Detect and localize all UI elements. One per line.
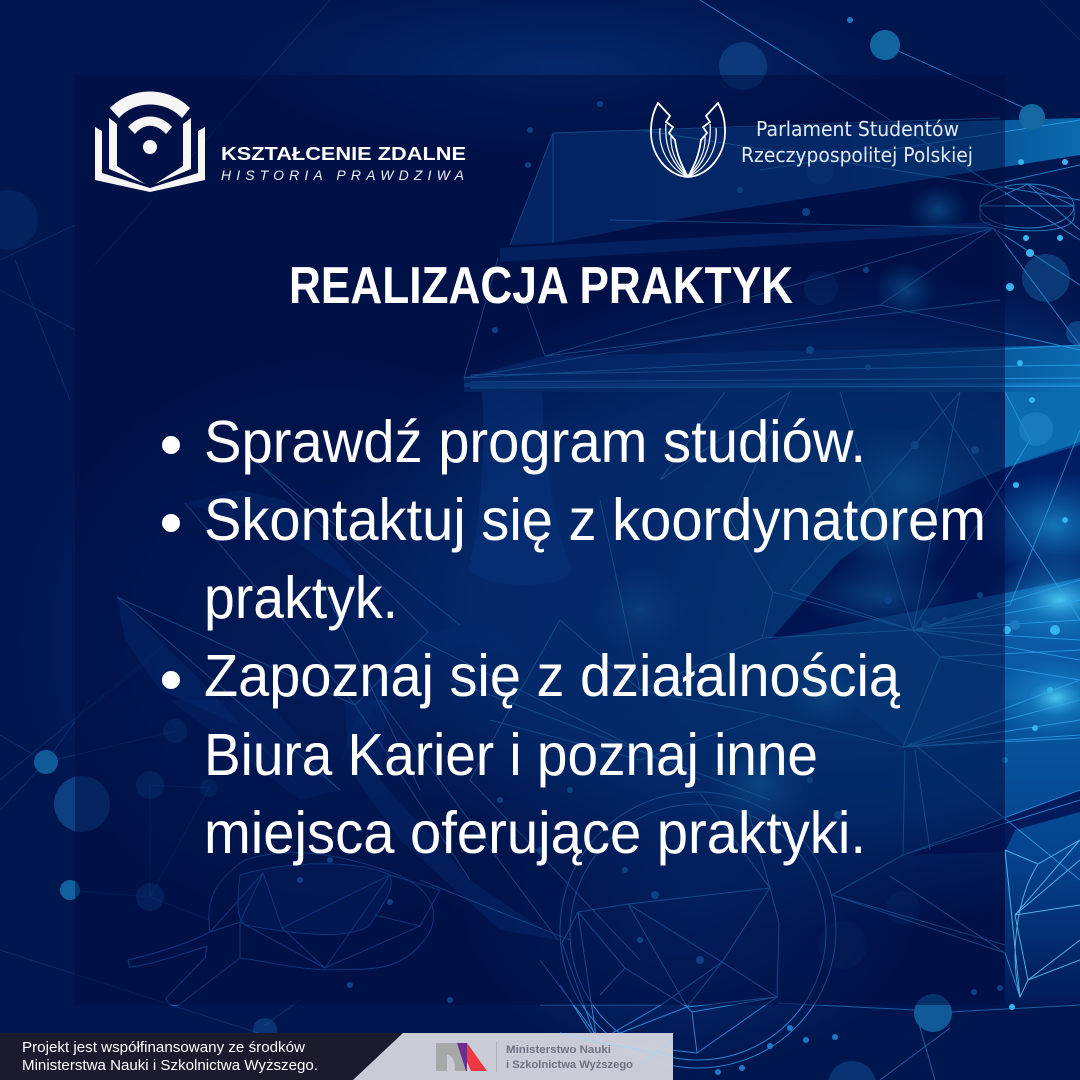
icon: U-shaped wings [651,103,725,177]
bullet marker 2 [162,514,180,532]
item 3 line 1: Zapoznaj się z działalnością [204,643,900,709]
globe lines over ministry panel [560,1033,673,1065]
strip book mesh [1005,840,1080,997]
wireframe globe [540,792,836,1068]
panel: dark overlay [75,75,1005,1005]
leaf mesh [128,853,440,1006]
item 3 line 3: miejsca oferujące praktyki. [204,800,866,866]
item 3 line 2: Biura Karier i poznaj inne [204,722,818,788]
bullet marker 3 [162,671,180,689]
footer: light ministry panel [353,1033,673,1080]
organisation name line 2: Rzeczypospolitej Polskiej [741,143,973,167]
logo: Kształcenie Zdalne [95,92,466,192]
ministry name: Ministerstwo Nauki [506,1044,611,1056]
logo wordmark: KSZTAŁCENIE ZDALNE [221,144,466,164]
logo: Parlament Studentów [651,103,973,177]
organisation name: Parlament Studentów [756,117,959,141]
item 1: Sprawdź program studiów. [204,409,866,475]
item 2 line 2: praktyk. [204,565,398,631]
bullet marker 1 [162,436,180,454]
ministry logo [436,1042,633,1072]
bullet list [162,409,986,866]
footer: dark funding bar [0,1033,405,1080]
icon: ministry N mark [436,1042,497,1072]
baseline line [540,1003,1080,1080]
funding note [22,1040,318,1074]
logo tagline: HISTORIA PRAWDZIWA [221,167,464,183]
funding note line 2: Ministerstwa Nauki i Szkolnictwa Wyższego. [22,1058,318,1074]
funding note line 1: Projekt jest współfinansowany ze środków [22,1040,306,1056]
ministry name line 2: i Szkolnictwa Wyższego [506,1059,633,1071]
title: REALIZACJA PRAKTYK [289,257,793,315]
item 2 line 1: Skontaktuj się z koordynatorem [204,487,986,553]
icon: wifi book [95,92,205,192]
